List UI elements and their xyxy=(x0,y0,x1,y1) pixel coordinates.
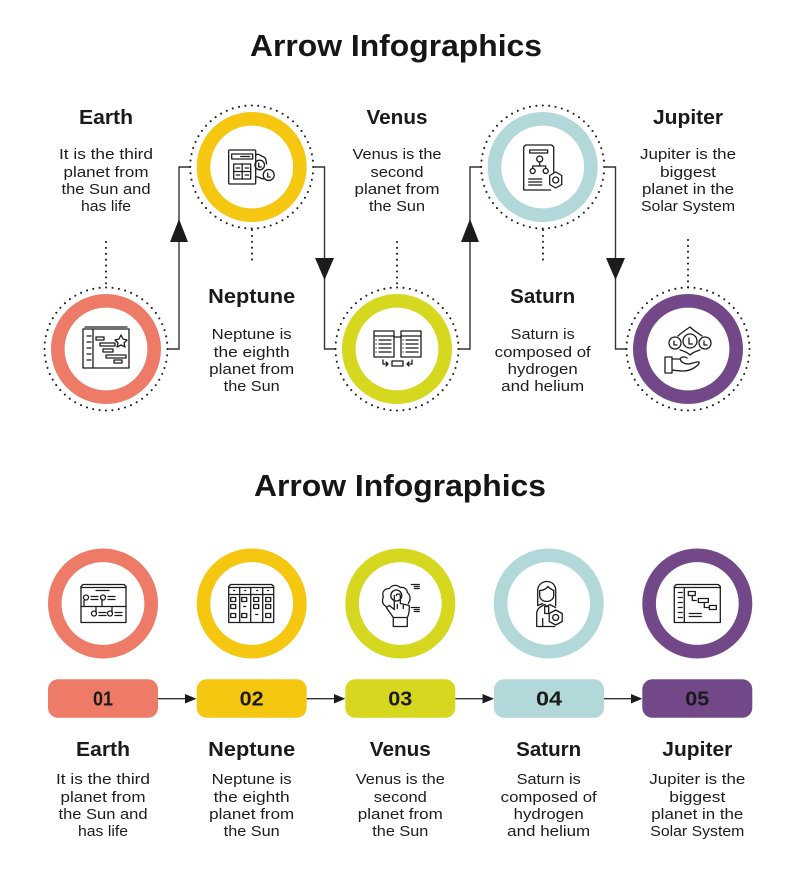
number badge: 03 xyxy=(345,679,455,718)
dotted connector xyxy=(105,242,107,288)
arrow: 04 to 05 xyxy=(604,694,642,704)
icon: flow diagram window xyxy=(81,584,126,622)
number badge: 02: 02 xyxy=(240,688,264,710)
ring: coral xyxy=(44,288,168,410)
column: 01 Earth xyxy=(48,555,158,840)
text: Venus description xyxy=(352,146,442,215)
text: Jupiter description: planet in the xyxy=(651,806,743,823)
step: Saturn xyxy=(481,106,604,395)
text: Venus description: the Sun xyxy=(372,823,428,840)
section: zigzag arrow infographic xyxy=(44,28,750,410)
text: Neptune description xyxy=(209,326,294,395)
arrow: 03 to 04 xyxy=(455,694,494,704)
heading: Saturn: Saturn xyxy=(510,286,575,308)
text: Saturn description: hydrogen xyxy=(514,806,584,823)
number badge: 04: 04 xyxy=(536,688,563,710)
icon: gantt chart xyxy=(83,327,129,368)
step: Venus xyxy=(336,107,458,410)
text: Neptune description: the eighth xyxy=(214,789,290,806)
text: Saturn description: and helium xyxy=(501,378,584,395)
heading: Venus: Venus xyxy=(370,739,431,761)
text: Venus description: second xyxy=(374,789,427,806)
text: Neptune description: planet from xyxy=(209,806,294,823)
text: Saturn description: Saturn is xyxy=(517,771,581,788)
column: 04 Saturn xyxy=(494,555,604,840)
heading: Saturn: Saturn xyxy=(516,739,581,761)
text: Earth description: the Sun and xyxy=(58,806,148,823)
step: Neptune xyxy=(190,106,313,395)
ring: purple xyxy=(626,288,750,410)
text: Saturn description: hydrogen xyxy=(508,361,578,378)
text: Venus description: Venus is the xyxy=(356,771,445,788)
text: Earth description: It is the third xyxy=(59,146,153,163)
text: Neptune description xyxy=(209,771,294,840)
text: Earth description: planet from xyxy=(60,789,146,806)
text: Venus description: second xyxy=(370,164,424,181)
text: Neptune description: Neptune is xyxy=(212,771,292,788)
icon: two linked forms xyxy=(374,331,421,366)
text: Jupiter description: Solar System xyxy=(641,198,735,215)
text: Saturn description: composed of xyxy=(495,344,592,361)
ring: yellow xyxy=(190,106,313,228)
ring: teal xyxy=(481,106,604,228)
text: Saturn description: and helium xyxy=(507,823,590,840)
text: Saturn description xyxy=(495,326,592,395)
heading: Jupiter: Jupiter xyxy=(662,739,733,761)
icon: hand holding coins xyxy=(665,327,711,373)
heading: Earth: Earth xyxy=(76,739,130,761)
text: Venus description xyxy=(356,771,445,840)
text: Neptune description: planet from xyxy=(209,361,294,378)
dotted connector xyxy=(251,230,253,260)
text: Venus description: planet from xyxy=(354,181,440,198)
arrow: 01 to 02 xyxy=(158,694,196,704)
text: Earth description: It is the third xyxy=(56,771,150,788)
text: Earth description: has life xyxy=(78,823,128,840)
dotted connector xyxy=(687,240,689,288)
number badge: 01 xyxy=(48,679,158,718)
ring: teal xyxy=(500,555,597,652)
title: bottom: Arrow Infographics xyxy=(254,468,546,503)
text: Earth description xyxy=(56,771,150,840)
number badge: 02 xyxy=(197,679,307,718)
heading: Venus: Venus xyxy=(366,107,428,129)
dotted connector xyxy=(542,230,544,260)
column: 02 Neptune xyxy=(197,555,307,840)
icon: calendar grid xyxy=(229,584,274,622)
text: Venus description: Venus is the xyxy=(352,146,442,163)
arrow: Earth to Neptune xyxy=(167,167,190,349)
text: Neptune description: the Sun xyxy=(224,823,280,840)
arrow: Venus to Saturn xyxy=(459,167,481,349)
text: Jupiter description xyxy=(640,146,736,215)
arrow: Saturn to Jupiter xyxy=(605,167,627,349)
text: Venus description: the Sun xyxy=(369,198,425,215)
text: Earth description: has life xyxy=(81,198,131,215)
text: Saturn description: Saturn is xyxy=(511,326,575,343)
text: Neptune description: Neptune is xyxy=(212,326,292,343)
text: Saturn description xyxy=(501,771,598,840)
ring: lime xyxy=(352,555,448,652)
number badge: 01: 01 xyxy=(93,688,113,710)
ring: lime xyxy=(336,288,458,410)
ring: coral xyxy=(55,555,151,652)
text: Saturn description: composed of xyxy=(501,789,598,806)
number badge: 04 xyxy=(494,679,604,718)
number badge: 05 xyxy=(642,679,752,718)
icon: clipboard with org chart and gear xyxy=(524,145,562,190)
text: Jupiter description: Jupiter is the xyxy=(640,146,736,163)
heading: Neptune: Neptune xyxy=(208,739,295,761)
text: Neptune description: the eighth xyxy=(214,344,290,361)
column: 05 Jupiter xyxy=(642,555,752,840)
text: Jupiter description: biggest xyxy=(660,164,717,181)
text: Jupiter description xyxy=(649,771,745,840)
text: Jupiter description: biggest xyxy=(669,789,726,806)
text: Neptune description: the Sun xyxy=(224,378,280,395)
heading: Earth: Earth xyxy=(79,107,133,129)
title: top: Arrow Infographics xyxy=(250,28,542,63)
number badge: 03: 03 xyxy=(388,688,412,710)
dotted connector xyxy=(396,242,398,288)
text: Earth description xyxy=(59,146,153,215)
section: numbered timeline infographic xyxy=(48,468,752,840)
ring: purple xyxy=(649,555,746,652)
text: Jupiter description: planet in the xyxy=(642,181,734,198)
column: 03 Venus xyxy=(345,555,455,840)
icon: window with flow steps xyxy=(674,584,720,622)
step: Jupiter xyxy=(626,107,750,410)
number badge: 05: 05 xyxy=(685,688,709,710)
icon: person with gear xyxy=(537,582,562,626)
icon: calculator and coins xyxy=(229,150,274,184)
heading: Neptune: Neptune xyxy=(208,286,295,308)
heading: Jupiter: Jupiter xyxy=(653,107,723,129)
text: Earth description: planet from xyxy=(64,164,148,181)
text: Jupiter description: Jupiter is the xyxy=(649,771,745,788)
text: Venus description: planet from xyxy=(358,806,443,823)
ring: yellow xyxy=(204,555,300,652)
text: Earth description: the Sun and xyxy=(62,181,150,198)
arrow: 02 to 03 xyxy=(307,694,345,704)
step: Earth xyxy=(44,107,168,410)
arrow: Neptune to Venus xyxy=(313,167,336,349)
icon: hand pressing gear button xyxy=(382,584,419,626)
text: Jupiter description: Solar System xyxy=(650,823,744,840)
